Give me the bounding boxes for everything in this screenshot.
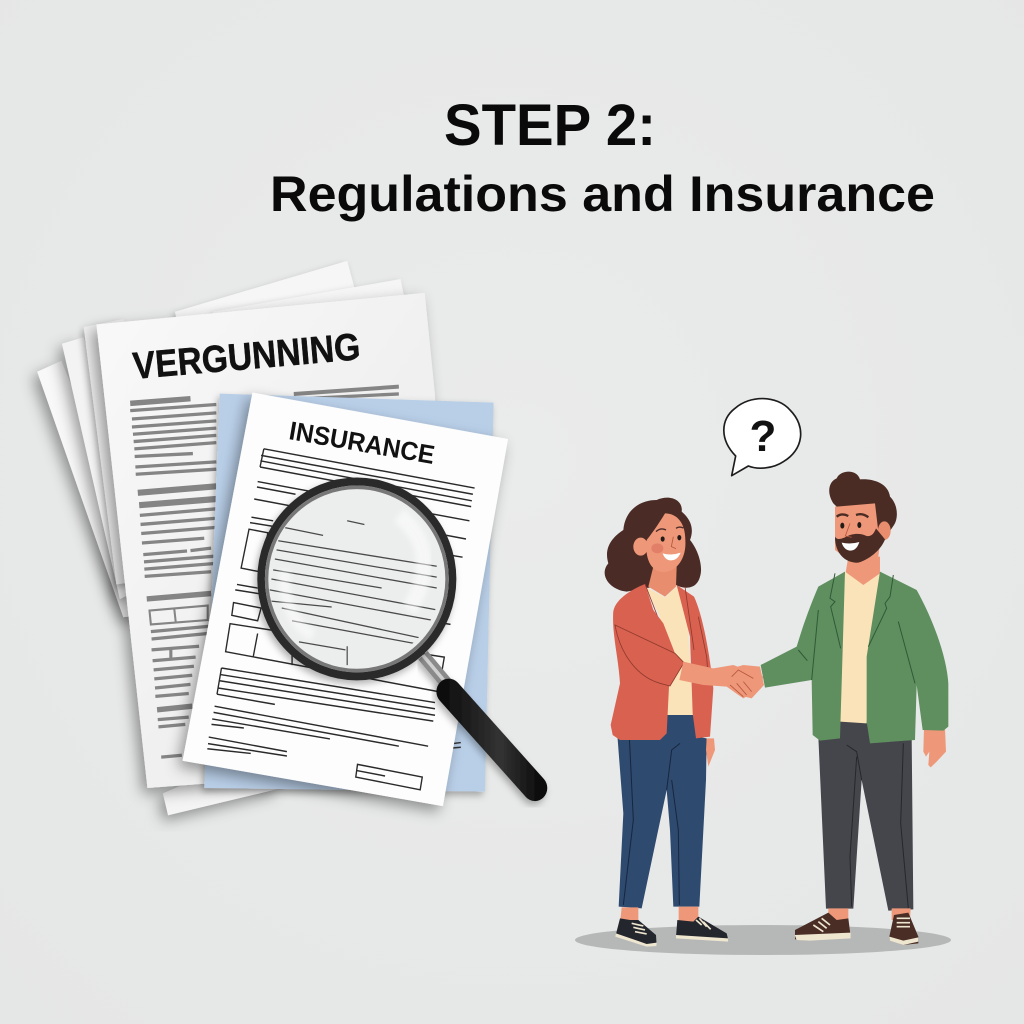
jacket xyxy=(611,584,713,740)
sleeve xyxy=(613,597,684,686)
ankles xyxy=(828,908,911,923)
speech bubble with question mark xyxy=(724,399,801,476)
heading: VERGUNNING: VERGUNNING xyxy=(131,326,362,388)
blue sheet xyxy=(204,394,494,792)
ankles xyxy=(620,907,698,923)
pants xyxy=(617,712,707,908)
title xyxy=(270,93,935,222)
arm xyxy=(679,662,763,698)
shoes xyxy=(615,917,728,947)
title: Regulations and Insurance xyxy=(270,166,935,222)
heading: INSURANCE: INSURANCE xyxy=(287,415,437,470)
neck xyxy=(845,557,880,586)
handshake hand xyxy=(726,665,764,698)
beard xyxy=(835,528,885,563)
top xyxy=(645,587,693,715)
person: woman xyxy=(605,498,763,947)
hair xyxy=(605,498,701,592)
ear xyxy=(633,538,648,556)
shoes xyxy=(795,913,918,945)
person: man xyxy=(726,472,948,945)
face xyxy=(835,502,882,563)
speech bubble with question mark: ? xyxy=(750,412,776,461)
panel: document stack xyxy=(37,261,535,815)
cheek xyxy=(651,543,663,553)
jacket xyxy=(761,572,948,743)
eyes and mouth xyxy=(837,514,868,551)
neck xyxy=(648,567,677,597)
hair xyxy=(829,472,897,533)
icon: magnifying glass xyxy=(261,482,535,788)
panel: two people shaking hands xyxy=(575,399,951,955)
infographic canvas xyxy=(26,104,951,955)
left hand xyxy=(706,738,715,767)
right hand xyxy=(923,728,946,767)
pants xyxy=(818,720,913,911)
ear xyxy=(878,521,891,540)
title: STEP 2: xyxy=(444,93,656,158)
top xyxy=(840,572,880,723)
fanned back sheets xyxy=(37,261,416,815)
face xyxy=(646,513,685,572)
ground shadow xyxy=(575,925,951,955)
insurance sheet xyxy=(183,392,508,806)
eyes and mouth xyxy=(656,527,683,560)
main sheet: permit document xyxy=(96,293,437,788)
